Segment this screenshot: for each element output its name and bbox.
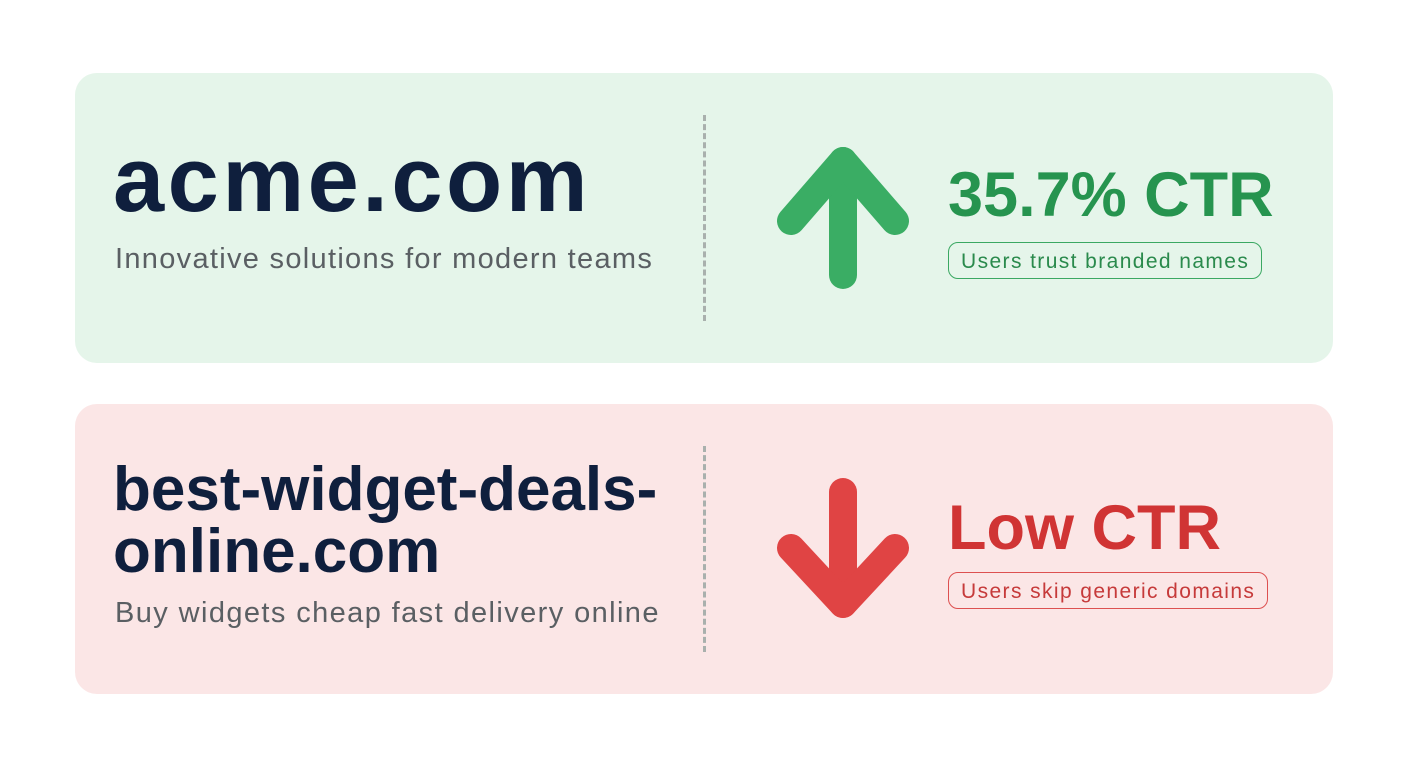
pill: users trust branded names xyxy=(948,242,1262,279)
panel: acme.com xyxy=(75,73,1333,363)
title: best-widget-deals-online.com: online.com xyxy=(113,517,440,586)
title: best-widget-deals-online.com: best-widget-deals- xyxy=(113,455,657,524)
stat: 35.7% CTR: 35.7% CTR xyxy=(948,160,1274,230)
subtitle: Buy widgets cheap fast delivery online xyxy=(115,597,660,629)
pill: users skip generic domains: Users skip generic domains xyxy=(961,580,1255,603)
icon: down arrow xyxy=(777,478,909,618)
icon: up arrow xyxy=(777,147,909,289)
title: acme.com: acme.com xyxy=(113,129,591,231)
pill: users skip generic domains xyxy=(948,572,1268,609)
title: best-widget-deals-online.com xyxy=(113,455,657,586)
stat: Low CTR: Low CTR xyxy=(948,493,1221,563)
subtitle: Innovative solutions for modern teams xyxy=(115,243,653,275)
panel: best-widget-deals-online.com xyxy=(75,404,1333,694)
pill: users trust branded names: Users trust branded names xyxy=(961,250,1249,273)
